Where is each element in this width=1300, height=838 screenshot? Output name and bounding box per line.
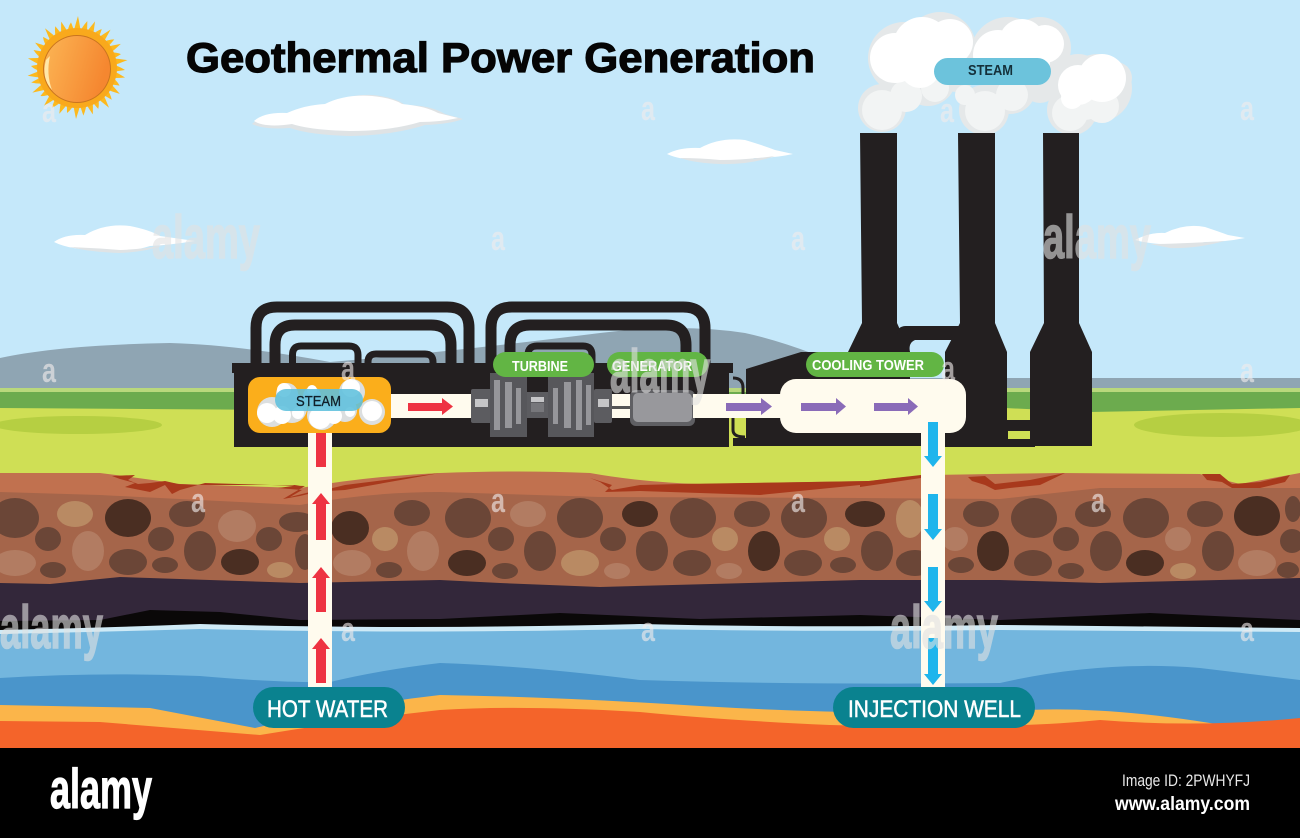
watermarks: a [940,92,955,130]
watermarks: a [341,611,356,649]
cloud 3 [54,225,195,253]
watermarks: alamy [890,594,998,661]
chimney stacks [733,133,1092,447]
watermarks: a [1240,352,1255,390]
groundwater layers [0,624,1300,748]
steam chamber [248,377,391,433]
arrow: purple 3 [874,398,918,415]
watermarks: a [491,482,506,520]
ground surface [0,388,1300,495]
watermarks: a [1240,611,1255,649]
title: Geothermal Power Generation [186,34,815,81]
hot water pipe [308,426,332,688]
watermarks: alamy [1043,204,1151,271]
arrow: purple 2 [801,398,846,415]
dark rock stratum [0,577,1300,640]
watermarks: a [42,92,57,130]
injection well label [833,687,1035,728]
footer image id: Image ID: 2PWHYFJ [1122,771,1250,790]
watermarks: alamy [610,338,710,405]
cloud 1 [252,95,463,136]
rock layer [0,488,1300,600]
turbine label [493,352,594,377]
footer url: www.alamy.com [1114,794,1250,815]
underground soil top layer [0,472,1300,600]
watermarks: a [491,220,506,258]
watermarks: a [1240,90,1255,128]
watermarks: alamy [152,204,260,271]
turbine [471,373,612,437]
power plant building [232,307,745,447]
sun [27,16,128,119]
watermarks: a [42,352,57,390]
turbine label: TURBINE [512,358,568,375]
watermarks: a [791,482,806,520]
injection well pipe [921,423,945,688]
cooling tower label: COOLING TOWER [812,357,924,374]
steam label in chamber: STEAM [296,393,341,410]
injection well label: INJECTION WELL [848,696,1021,723]
steam pill at chimneys [934,58,1051,85]
generator [612,390,698,426]
generator label [607,352,708,377]
steam plume above chimneys [858,12,1132,135]
cooling tower basin [693,379,966,437]
watermarks: a [1091,482,1106,520]
watermarks: a [641,90,656,128]
watermarks: a [791,220,806,258]
hot water label: HOT WATER [267,696,388,723]
steam label in chamber [275,389,363,411]
cloud 2 [667,139,793,164]
steam pipe to turbine [391,394,473,418]
watermarks: a [341,350,356,388]
sky background [0,0,1300,400]
distant hills [0,328,1300,395]
cloud 4 [1135,226,1245,248]
root fringes [112,473,1290,499]
watermarks: a [191,482,206,520]
magma layers [0,695,1300,748]
watermarks: alamy [0,594,103,661]
steam pill at chimneys: STEAM [968,62,1013,79]
hot water label [253,687,405,728]
watermarks: a [641,611,656,649]
footer band [0,748,1300,838]
black stratum [0,610,1300,640]
arrow: purple 1 [726,398,772,415]
watermarks [0,90,1255,661]
cooling tower label [806,352,944,377]
footer logo: alamy [50,757,152,820]
watermarks: a [941,350,956,388]
generator label: GENERATOR [612,358,692,375]
